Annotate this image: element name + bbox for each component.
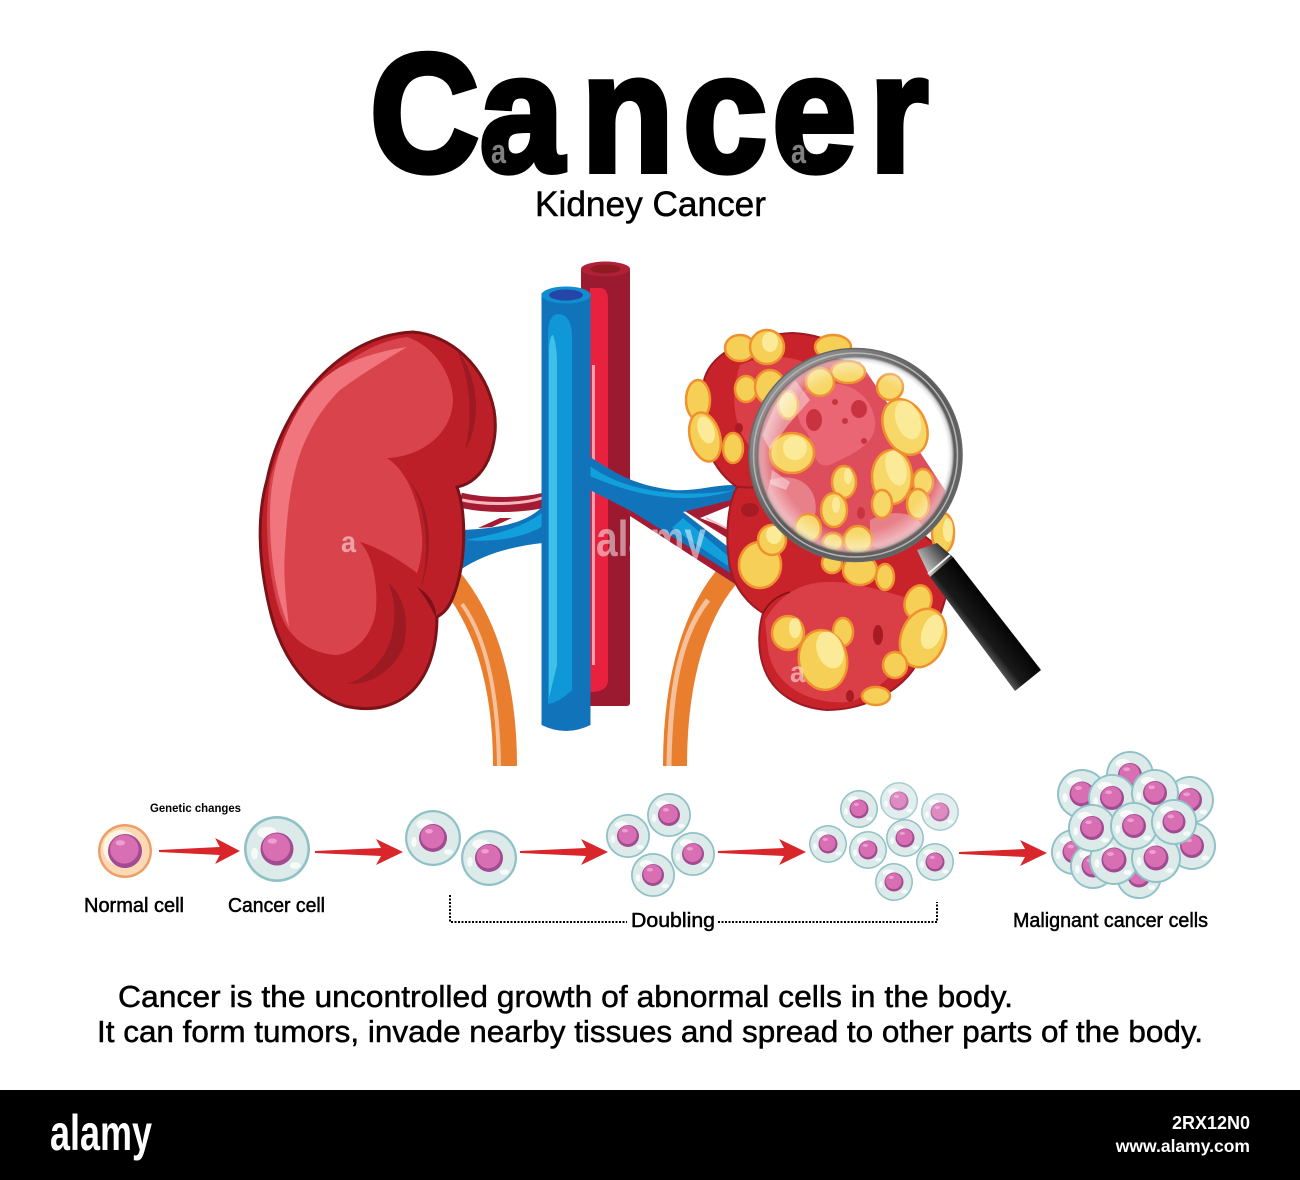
eight cells [809, 782, 959, 901]
rim [753, 352, 958, 558]
title: Cancer [370, 19, 928, 207]
label: cancer cell: Cancer cell [228, 895, 325, 917]
footer url: www.alamy.com [1115, 1136, 1250, 1156]
watermark: alamy: alamy [596, 511, 706, 567]
kidney: healthy [260, 332, 495, 709]
arrow 2 [315, 839, 403, 865]
description [97, 979, 1203, 1049]
label: genetic changes: Genetic changes [150, 801, 241, 815]
kidney: cancerous [702, 333, 950, 710]
footer logo: alamy [50, 1105, 152, 1161]
renal artery: right [625, 495, 742, 584]
tumours [684, 330, 954, 705]
footer bar [0, 1090, 1300, 1180]
aorta [581, 262, 630, 706]
ureter: left [444, 572, 505, 766]
watermark: alamy [341, 133, 807, 689]
description: It can form tumors, invade nearby tissues and spread to other parts of the body. [97, 1014, 1203, 1049]
footer image id: 2RX12N0 [1172, 1113, 1250, 1133]
cancer cell [244, 816, 310, 882]
handle [917, 543, 1041, 691]
description: Cancer is the uncontrolled growth of abnormal cells in the body. [118, 979, 1013, 1014]
watermark: alamy: a [491, 133, 507, 171]
kidney anatomy illustration [260, 133, 1041, 766]
malignant cluster [1051, 751, 1216, 899]
label: normal cell: Normal cell [84, 895, 184, 917]
arrow 1 [159, 838, 240, 864]
watermark: alamy: a [790, 656, 805, 689]
renal vein: right [590, 457, 745, 574]
magnifying glass [745, 345, 1041, 691]
arrow 3 [520, 839, 608, 865]
ureter: right [669, 565, 738, 766]
subtitle: Kidney Cancer [535, 185, 766, 224]
normal cell [98, 824, 152, 878]
tumour highlights [694, 332, 953, 672]
vena cava [542, 286, 590, 731]
renal artery: left [460, 498, 545, 528]
four cells [606, 793, 715, 897]
label: malignant cancer cells: Malignant cancer cells [1013, 910, 1208, 932]
lens [757, 356, 954, 554]
renal vein: left [460, 506, 543, 570]
label: doubling: Doubling [631, 910, 715, 932]
arrow 4 [718, 839, 806, 865]
watermark: alamy: a [341, 526, 356, 559]
two cells [405, 810, 517, 886]
arrow 5 [959, 840, 1047, 866]
cell progression diagram [84, 751, 1216, 932]
watermark: alamy: a [791, 133, 807, 171]
doubling bracket [450, 895, 937, 932]
